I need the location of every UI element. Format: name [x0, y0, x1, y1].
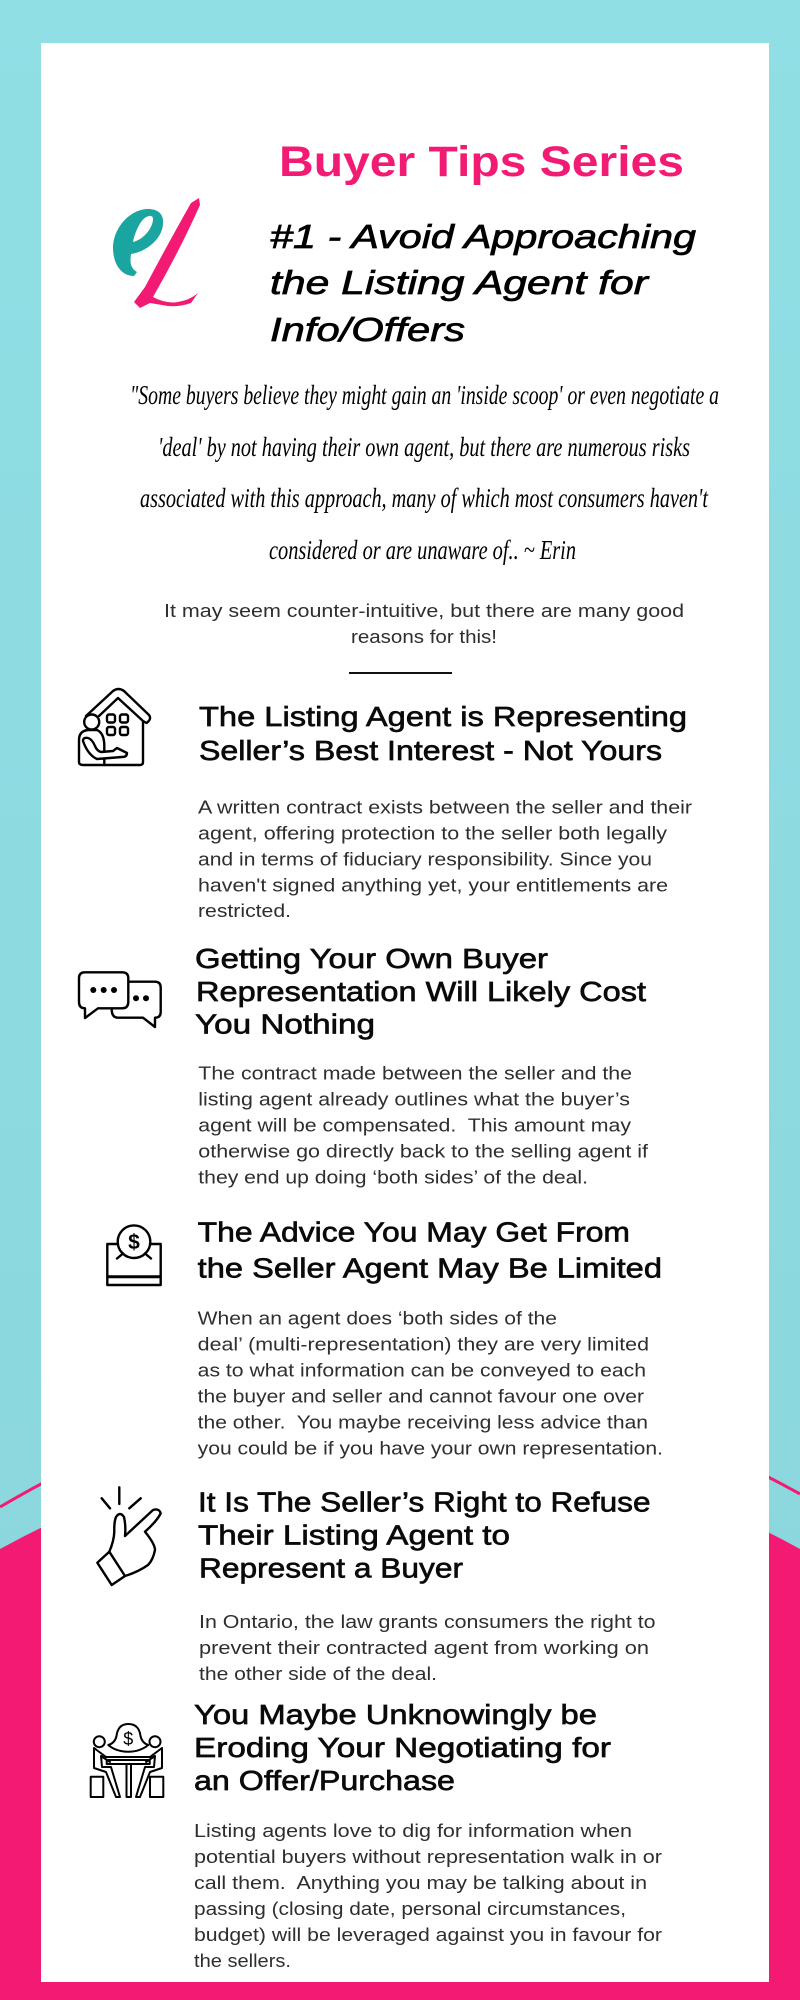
body text: the other side of the deal.	[199, 1664, 437, 1684]
heading: You Maybe Unknowingly be	[194, 1699, 597, 1730]
body text	[194, 1821, 662, 1971]
subtitle	[270, 218, 697, 348]
icon: negotiation at table	[91, 1724, 163, 1797]
panel: tip 2	[79, 943, 649, 1187]
subtitle: #1 - Avoid Approaching	[270, 218, 697, 255]
panel: tip 4	[97, 1486, 656, 1684]
heading: Represent a Buyer	[199, 1552, 463, 1584]
intro text	[164, 601, 684, 647]
icon: negotiation at table: $	[123, 1729, 133, 1749]
subtitle: Info/Offers	[270, 311, 465, 348]
panel: tip 5	[91, 1699, 662, 1971]
body text: agent, offering protection to the seller both legally	[198, 823, 668, 843]
body text: A written contract exists between the seller and their	[198, 797, 692, 817]
heading: an Offer/Purchase	[194, 1765, 455, 1796]
body text: the other. You maybe receiving less advice than	[198, 1412, 648, 1432]
subtitle: the Listing Agent for	[270, 264, 651, 301]
body text: restricted.	[198, 901, 291, 921]
body text: deal’ (multi-representation) they are very limited	[198, 1334, 649, 1354]
icon: agent and house	[79, 689, 150, 765]
quote: considered or are unaware of.. ~ Erin	[269, 535, 576, 565]
title: Buyer Tips Series	[279, 139, 684, 186]
body text: the sellers.	[194, 1951, 291, 1971]
heading	[199, 701, 687, 766]
quote	[130, 380, 719, 565]
body text: listing agent already outlines what the buyer’s	[198, 1089, 630, 1109]
body text: agent will be compensated. This amount may	[198, 1115, 632, 1135]
body text: prevent their contracted agent from working on	[199, 1638, 649, 1658]
body text: the buyer and seller and cannot favour one over	[198, 1386, 644, 1406]
heading	[198, 1486, 650, 1584]
body text	[199, 1612, 656, 1684]
body text: passing (closing date, personal circumstances,	[194, 1899, 626, 1919]
heading: Their Listing Agent to	[198, 1520, 510, 1551]
body text: The contract made between the seller and the	[198, 1063, 632, 1083]
heading	[194, 1699, 611, 1796]
body text: as to what information can be conveyed to each	[198, 1360, 646, 1380]
body text: they end up doing ‘both sides’ of the deal.	[198, 1167, 588, 1187]
icon: money box	[107, 1225, 161, 1285]
heading	[198, 1217, 662, 1284]
body text: budget) will be leveraged against you in favour for	[194, 1925, 662, 1945]
heading: You Nothing	[195, 1008, 375, 1040]
body text	[198, 1308, 663, 1458]
heading: the Seller Agent May Be Limited	[198, 1253, 662, 1284]
body text: you could be if you have your own representation.	[198, 1438, 663, 1458]
body text	[198, 797, 692, 921]
body text: otherwise go directly back to the selling agent if	[198, 1141, 649, 1161]
heading: The Advice You May Get From	[198, 1217, 630, 1248]
heading: Seller’s Best Interest - Not Yours	[199, 735, 662, 766]
body text	[198, 1063, 649, 1187]
heading: It Is The Seller’s Right to Refuse	[198, 1486, 650, 1517]
body text: and in terms of fiduciary responsibility. Since you	[198, 849, 652, 869]
heading: The Listing Agent is Representing	[199, 701, 687, 732]
body text: call them. Anything you may be talking about in	[194, 1873, 647, 1893]
heading: Eroding Your Negotiating for	[194, 1732, 611, 1763]
body text: In Ontario, the law grants consumers the right to	[199, 1612, 656, 1632]
body text: Listing agents love to dig for information when	[194, 1821, 632, 1841]
panel: tip 1	[79, 689, 692, 921]
heading: Representation Will Likely Cost	[196, 976, 646, 1007]
body text: When an agent does ‘both sides of the	[198, 1308, 557, 1328]
body text: haven't signed anything yet, your entitlements are	[198, 875, 668, 895]
intro text: reasons for this!	[351, 627, 497, 647]
intro text: It may seem counter-intuitive, but there are many good	[164, 601, 684, 621]
icon: finger snap	[97, 1487, 161, 1585]
logo	[113, 198, 200, 308]
icon: speech bubbles	[79, 972, 161, 1027]
panel: tip 3	[107, 1217, 663, 1458]
icon: money box: $	[128, 1231, 140, 1254]
heading	[195, 943, 646, 1040]
heading: Getting Your Own Buyer	[195, 943, 548, 974]
body text: potential buyers without representation walk in or	[194, 1847, 662, 1867]
